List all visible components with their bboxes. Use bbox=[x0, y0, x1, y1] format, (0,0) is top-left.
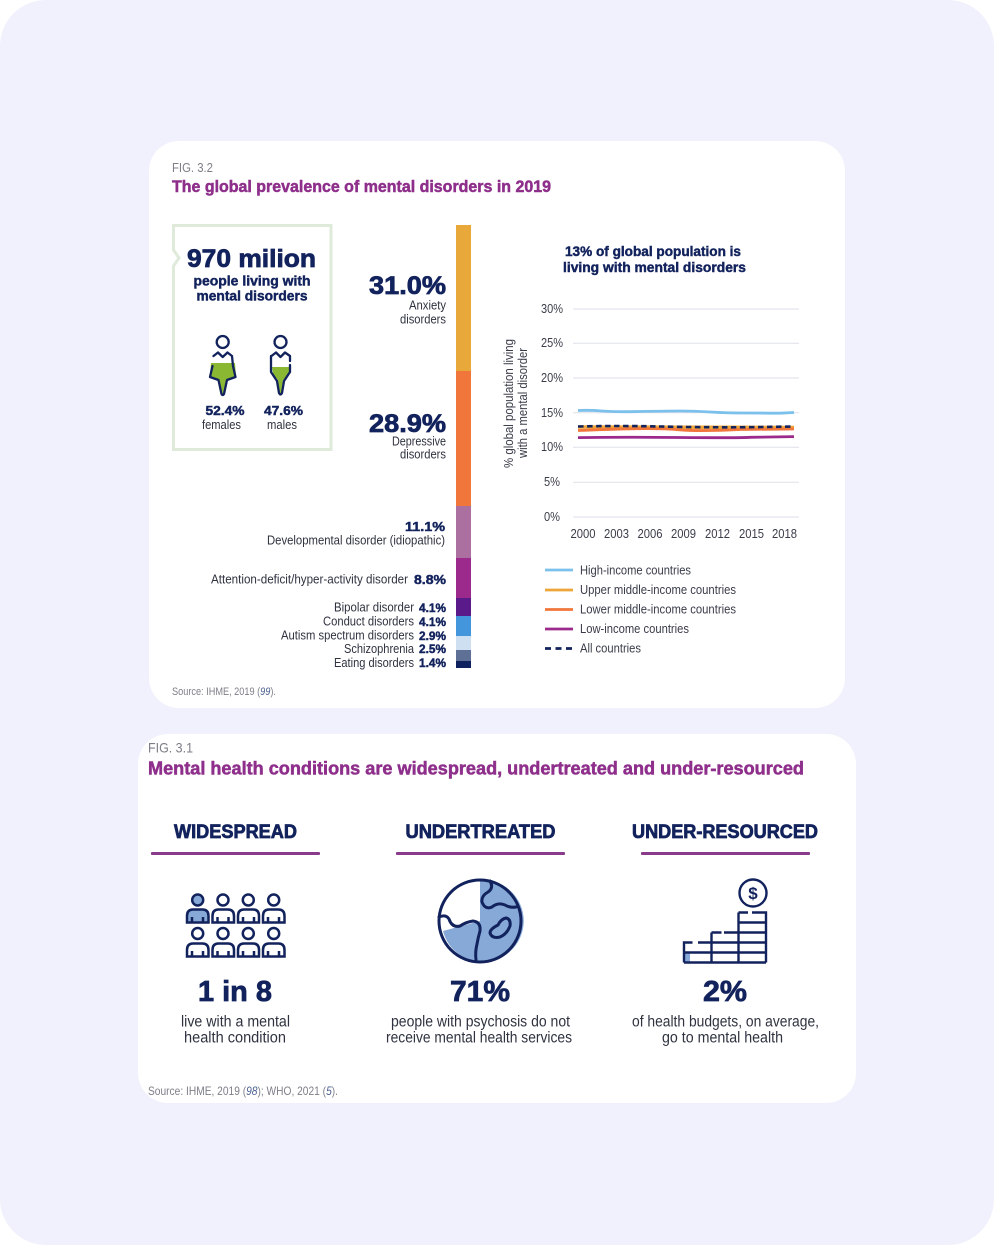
callout: 970 million: mental disorders bbox=[196, 288, 308, 304]
line chart bbox=[502, 302, 799, 541]
chart heading: 13% of global population is bbox=[565, 243, 741, 259]
figure label: FIG. 3.1 bbox=[148, 740, 193, 756]
column: under-resourced: UNDER-RESOURCED bbox=[632, 822, 818, 843]
title: Mental health conditions are widespread, undertreated and under-resourced bbox=[148, 758, 804, 778]
bar labels: disorders bbox=[400, 312, 446, 326]
column: widespread: 1 in 8 bbox=[198, 976, 272, 1008]
column: undertreated: receive mental health services bbox=[386, 1030, 572, 1046]
callout: 970 million: males bbox=[267, 418, 297, 432]
line chart: with a mental disorder bbox=[516, 348, 530, 459]
column: under-resourced: 2% bbox=[703, 976, 747, 1008]
chart legend: All countries bbox=[580, 642, 641, 656]
line chart: 2006 bbox=[638, 527, 663, 541]
line chart: 2003 bbox=[604, 527, 629, 541]
icon: globe bbox=[439, 880, 524, 962]
bar labels: Depressive bbox=[392, 434, 446, 448]
line chart: % global population living bbox=[502, 339, 516, 468]
bar labels: Attention-deficit/hyper-activity disorder bbox=[211, 572, 408, 586]
line chart: 10% bbox=[541, 440, 563, 454]
column: widespread bbox=[151, 822, 320, 1046]
column: undertreated: UNDERTREATED bbox=[406, 822, 556, 843]
line chart: 2018 bbox=[772, 527, 797, 541]
bar labels: Bipolar disorder bbox=[334, 600, 414, 614]
chart legend bbox=[545, 564, 736, 656]
panel: global prevalence of mental disorders bbox=[149, 141, 845, 708]
callout: 970 million: 52.4% bbox=[206, 404, 244, 418]
callout: 970 million: 970 milion bbox=[187, 245, 316, 273]
bar labels: 4.1% bbox=[419, 601, 446, 615]
chart legend: Low-income countries bbox=[580, 622, 689, 636]
bar labels: 2.5% bbox=[419, 642, 446, 656]
line chart: 15% bbox=[541, 406, 563, 420]
column: undertreated: 71% bbox=[450, 976, 510, 1008]
icon: budget stack with coin: $ bbox=[748, 884, 758, 903]
line chart: 25% bbox=[541, 336, 563, 350]
line chart: 2000 bbox=[570, 527, 596, 541]
icon: female figure bbox=[210, 336, 236, 395]
title: The global prevalence of mental disorders in 2019 bbox=[172, 177, 551, 196]
bar labels: Autism spectrum disorders bbox=[281, 628, 414, 642]
line chart: 2012 bbox=[705, 527, 730, 541]
callout: 970 million: females bbox=[202, 418, 241, 432]
chart legend: Upper middle-income countries bbox=[580, 583, 736, 597]
column: undertreated bbox=[386, 822, 572, 1046]
bar labels: Eating disorders bbox=[334, 656, 414, 670]
line chart: 5% bbox=[544, 475, 560, 489]
icon: group of people bbox=[187, 894, 284, 956]
callout: 970 million: people living with bbox=[194, 272, 310, 288]
bar labels: Schizophrenia bbox=[344, 642, 414, 656]
chart heading bbox=[563, 243, 746, 275]
panel: mental health conditions bbox=[138, 734, 856, 1103]
chart legend: High-income countries bbox=[580, 564, 691, 578]
column: undertreated: people with psychosis do not bbox=[391, 1014, 571, 1030]
bar labels: 4.1% bbox=[419, 615, 446, 629]
chart heading: living with mental disorders bbox=[563, 259, 746, 275]
column: widespread: health condition bbox=[184, 1030, 286, 1046]
bar labels bbox=[211, 272, 447, 670]
icon: male figure bbox=[271, 336, 290, 394]
column: widespread: live with a mental bbox=[181, 1014, 290, 1030]
icon: budget stack with coin bbox=[684, 880, 766, 962]
column: under-resourced: of health budgets, on average, bbox=[632, 1014, 819, 1030]
callout: 970 million: 47.6% bbox=[264, 404, 303, 418]
source note: Source: IHME, 2019 (99). bbox=[172, 686, 276, 698]
bar labels: 31.0% bbox=[369, 272, 446, 300]
line chart: 0% bbox=[544, 510, 560, 524]
bar labels: Conduct disorders bbox=[323, 614, 414, 628]
figure label: FIG. 3.2 bbox=[172, 161, 213, 175]
column: under-resourced bbox=[632, 822, 819, 1046]
chart legend: Lower middle-income countries bbox=[580, 602, 736, 616]
bar labels: 28.9% bbox=[369, 410, 446, 438]
bar labels: Anxiety bbox=[409, 298, 447, 312]
bar labels: 11.1% bbox=[405, 519, 445, 534]
bar labels: 8.8% bbox=[414, 572, 446, 587]
line chart: 2015 bbox=[739, 527, 764, 541]
callout: 970 million bbox=[174, 226, 331, 450]
column: widespread: WIDESPREAD bbox=[174, 822, 297, 843]
stacked bar bbox=[456, 225, 471, 668]
bar labels: disorders bbox=[400, 448, 446, 462]
line chart: 30% bbox=[541, 302, 563, 316]
bar labels: Developmental disorder (idiopathic) bbox=[267, 534, 445, 548]
source note: Source: IHME, 2019 (98); WHO, 2021 (5). bbox=[148, 1084, 338, 1098]
line chart: 20% bbox=[541, 371, 563, 385]
bar labels: 1.4% bbox=[419, 656, 446, 670]
line chart: 2009 bbox=[671, 527, 696, 541]
column: under-resourced: go to mental health bbox=[662, 1030, 783, 1046]
bar labels: 2.9% bbox=[419, 629, 446, 643]
